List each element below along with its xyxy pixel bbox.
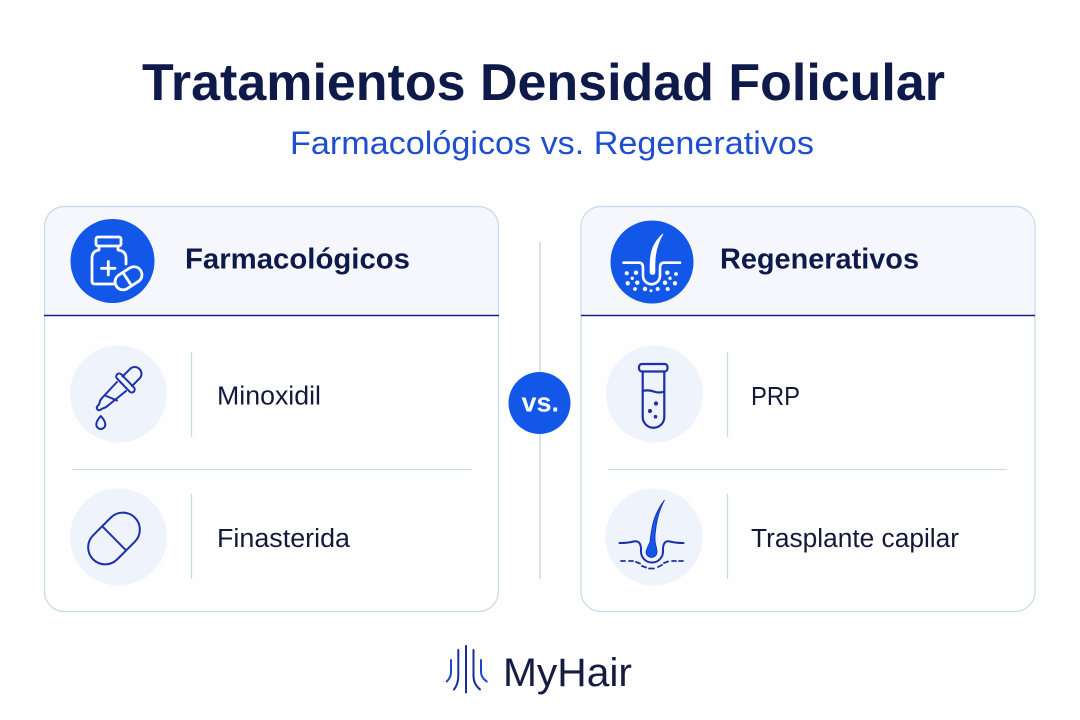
heading: Regenerativos: Regenerativos [720, 244, 919, 276]
icon: hair strands logo [447, 646, 487, 692]
title: Tratamientos Densidad Folicular [142, 54, 945, 112]
item: Trasplante capilar: Trasplante capilar [751, 525, 960, 553]
item: Minoxidil [70, 346, 321, 442]
center divider with vs. badge: vs. [522, 388, 559, 418]
item: PRP [606, 346, 800, 442]
icon: medicine bottle and pill [70, 219, 154, 303]
icon: hair follicle [610, 220, 694, 304]
subtitle: Farmacológicos vs. Regenerativos [290, 125, 814, 161]
icon: capsule [70, 488, 167, 586]
heading: Farmacológicos: Farmacológicos [185, 244, 410, 276]
icon: dropper [70, 346, 167, 442]
item: Trasplante capilar [606, 488, 960, 586]
item: Finasterida: Finasterida [217, 525, 351, 553]
center divider with vs. badge [508, 242, 570, 579]
panel: Farmacológicos [44, 206, 499, 612]
logo: MyHair [447, 646, 632, 695]
item: PRP: PRP [751, 383, 800, 411]
icon: hair transplant follicle [606, 488, 702, 586]
panel: Regenerativos [581, 206, 1035, 612]
item: Minoxidil: Minoxidil [217, 382, 321, 410]
icon: test tube [606, 346, 703, 442]
logo: MyHair: MyHair [503, 651, 632, 695]
item: Finasterida [70, 488, 351, 586]
